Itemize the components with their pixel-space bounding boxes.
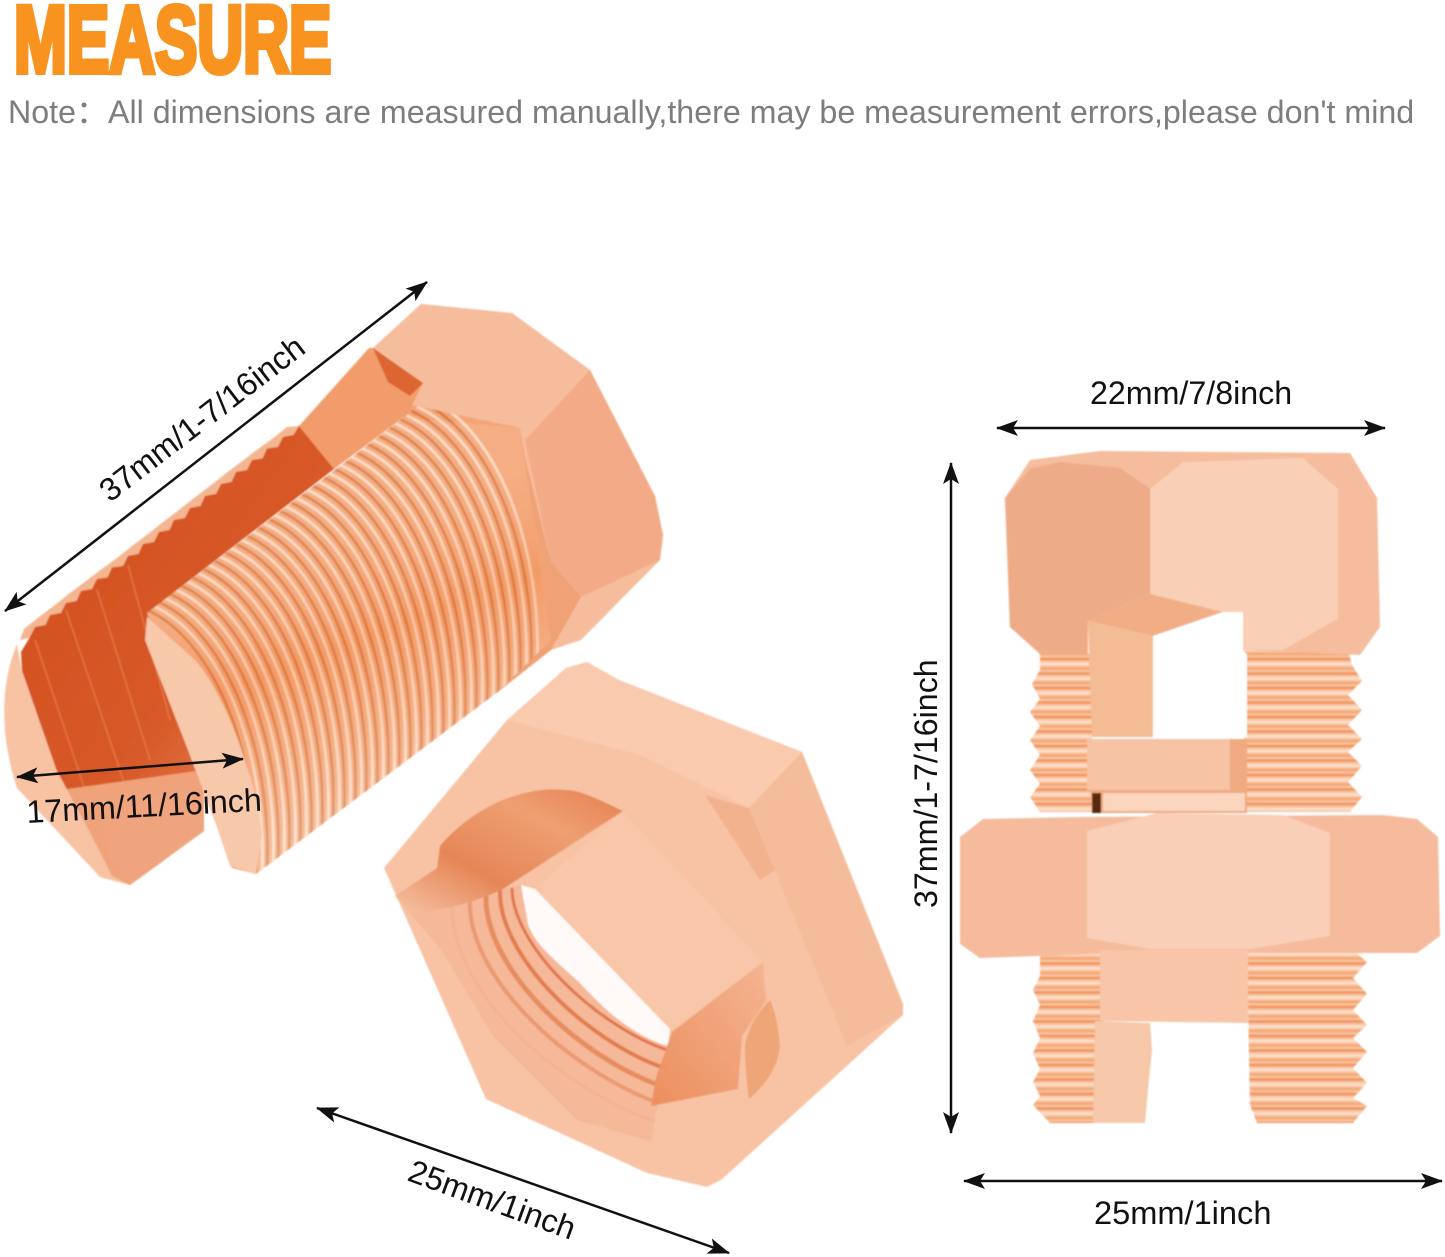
strap side	[1088, 621, 1153, 737]
threaded shaft	[145, 405, 551, 874]
head top facet	[373, 304, 590, 435]
split bolt assembled	[960, 451, 1440, 1123]
dimension arrow: bolt length	[5, 282, 427, 611]
nut right facet	[749, 752, 903, 1046]
bore threads	[409, 885, 668, 1141]
lower right thread	[1247, 950, 1367, 1123]
sleeve	[1087, 739, 1247, 813]
mid nut	[960, 815, 1440, 958]
strap underside	[1088, 594, 1223, 636]
lower left thread	[1033, 952, 1103, 1123]
lower tail	[1093, 1021, 1152, 1123]
right cut face	[145, 617, 262, 874]
nut body	[384, 662, 903, 1187]
slot far face	[299, 348, 423, 469]
right chamfer hollow	[745, 1000, 780, 1099]
nut bevel highlight	[705, 795, 775, 880]
product illustration and dimensions	[3, 281, 1443, 1254]
top nut	[1005, 451, 1380, 655]
top nut left face	[1005, 462, 1150, 654]
thread ridges	[147, 398, 551, 880]
label: 25mm/1inch	[1094, 1194, 1271, 1231]
slot wedge upper	[395, 789, 623, 913]
head shoulder bevel	[412, 405, 581, 691]
threaded bolt	[4, 304, 663, 885]
white opening	[521, 885, 670, 1046]
upper right thread	[1244, 650, 1362, 812]
lower strap	[1100, 950, 1248, 1023]
upper left thread	[1030, 654, 1092, 812]
note text: Note：	[8, 94, 108, 130]
label: 37mm/1-7/16inch	[92, 329, 312, 509]
label: 17mm/11/16inch	[25, 782, 263, 830]
lower thread tail	[60, 770, 204, 885]
bolt head	[373, 304, 663, 691]
sleeve gap	[1092, 793, 1101, 813]
slot wedge lower	[651, 962, 766, 1106]
slot deep corner	[373, 348, 423, 396]
dimension arrow: nut width	[317, 1108, 729, 1253]
hex nut	[384, 662, 903, 1187]
dimension arrow: bolt width	[17, 759, 263, 830]
slot teeth	[20, 426, 334, 640]
label: 25mm/1inch	[404, 1153, 581, 1247]
top nut center face	[1150, 458, 1338, 650]
note text: All dimensions are measured manually,there may be measurement errors,please don't mind	[108, 94, 1414, 130]
slot red interior	[21, 426, 334, 885]
label: 22mm/7/8inch	[1090, 375, 1292, 411]
sleeve lower bar	[1103, 793, 1245, 811]
mid nut center face	[1087, 813, 1330, 949]
inner slot face	[535, 811, 763, 1029]
window	[1153, 612, 1247, 737]
head right facet	[525, 370, 663, 597]
nut top facet	[507, 662, 802, 808]
label: 37mm/1-7/16inch	[908, 659, 944, 908]
sleeve cylinder	[1087, 739, 1230, 790]
left cut face	[4, 644, 130, 885]
thread arcs	[452, 888, 667, 1122]
slot streaks	[35, 565, 170, 820]
